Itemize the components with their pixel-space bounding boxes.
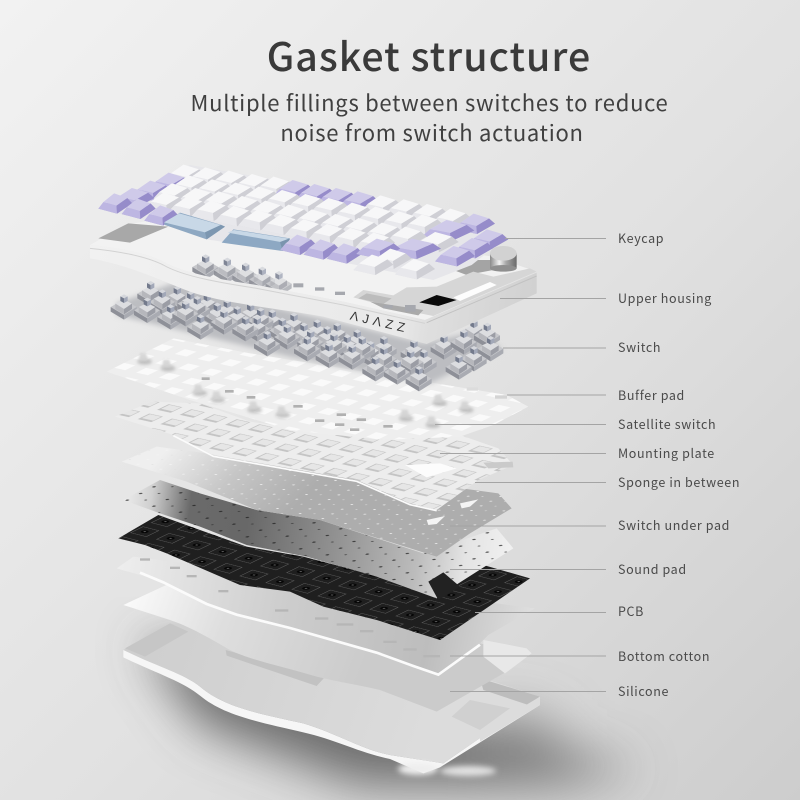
row 5: [165, 165, 495, 234]
row 4: [150, 173, 508, 250]
mounting plate: [115, 402, 513, 511]
label: Mounting plate: Mounting plate: [618, 443, 715, 462]
label: Satellite switch: Satellite switch: [618, 414, 716, 433]
upper housing: [90, 213, 537, 344]
switch under pad: [123, 480, 513, 600]
label: Buffer pad: Buffer pad: [618, 385, 685, 404]
sponge in between: [122, 447, 512, 557]
knob: [490, 246, 517, 272]
bottom edge smudge: [398, 763, 496, 776]
front wall: [90, 245, 537, 344]
label: Sponge in between: Sponge in between: [618, 472, 740, 491]
label: PCB: PCB: [618, 601, 644, 620]
bottom cotton: [123, 584, 532, 712]
sound pad: [117, 557, 535, 675]
label: Upper housing: Upper housing: [618, 288, 712, 307]
row 1: [98, 193, 435, 279]
label: Silicone: Silicone: [618, 681, 669, 700]
label: Bottom cotton: Bottom cotton: [618, 646, 710, 665]
satellite switches: [137, 353, 474, 428]
case shadow: [140, 640, 640, 785]
title: Gasket structure: [267, 26, 591, 83]
oled screen: [419, 295, 457, 306]
buffer pad: [107, 338, 528, 440]
silicone bottom case: [123, 623, 540, 773]
PCB: [118, 515, 530, 640]
small switch tops seen through frame: [192, 254, 292, 296]
row 2: [112, 188, 475, 266]
label: Keycap: Keycap: [618, 228, 664, 247]
label: Switch under pad: Switch under pad: [618, 515, 730, 534]
logo: ΛJΛZZ: [349, 309, 411, 336]
label: Sound pad: Sound pad: [618, 559, 687, 578]
keycaps: [98, 165, 517, 280]
subtitle: noise from switch actuation: [280, 116, 584, 148]
switches: [111, 281, 503, 391]
row 3: [132, 181, 493, 258]
label: Switch: Switch: [618, 337, 661, 356]
subtitle: [191, 86, 668, 148]
subtitle: Multiple fillings between switches to reduce: [191, 86, 668, 118]
